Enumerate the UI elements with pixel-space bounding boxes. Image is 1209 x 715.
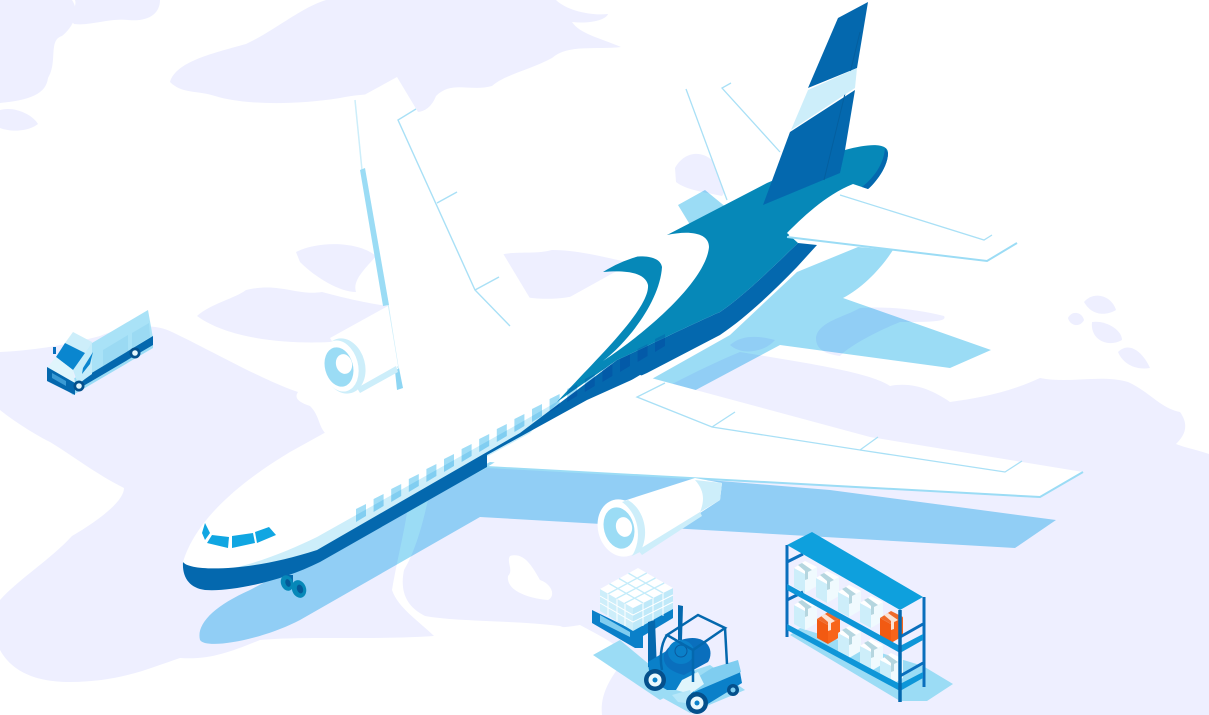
rack frame (787, 545, 924, 687)
shelving rack (787, 532, 953, 702)
van wheels (74, 380, 84, 392)
far wing flap band (360, 168, 389, 306)
van lower band (75, 336, 153, 388)
van cab (65, 332, 92, 353)
cockpit windows (202, 523, 276, 548)
rack boxes (794, 561, 903, 685)
tail fin (763, 2, 868, 205)
forklift mast (678, 605, 683, 640)
teal tail livery (557, 145, 888, 402)
far wing flap lines (398, 109, 510, 326)
white swoosh (603, 233, 709, 361)
delivery van (47, 310, 153, 395)
map coast visible through shadow (730, 307, 945, 356)
fuselage (183, 145, 888, 600)
forklift cage (661, 615, 727, 682)
near tailplane (787, 195, 1017, 262)
white bays in map (420, 555, 626, 715)
pallet (592, 604, 673, 648)
near wing flap lines (637, 383, 1022, 472)
far engine (316, 306, 398, 398)
tail engine dark edge (862, 148, 888, 189)
nose landing gear (279, 573, 309, 600)
pallet cargo stacks (600, 589, 633, 631)
forklift rear (690, 672, 742, 707)
forklift with pallet (592, 568, 745, 714)
forklift front base (648, 650, 695, 690)
near wing (487, 375, 1083, 497)
near engine (591, 478, 722, 562)
van cargo body (90, 310, 153, 375)
cabin windows (356, 334, 665, 522)
dark belly stripe (183, 243, 817, 590)
fuselage light belly stripe (205, 400, 560, 572)
forklift wheels (644, 669, 739, 714)
far wing (355, 77, 640, 400)
forklift engine drum (664, 638, 710, 675)
rack shelves (787, 584, 923, 653)
plane ground shadow (199, 190, 1056, 644)
rack top board (787, 532, 923, 610)
far tailplane (686, 83, 790, 200)
